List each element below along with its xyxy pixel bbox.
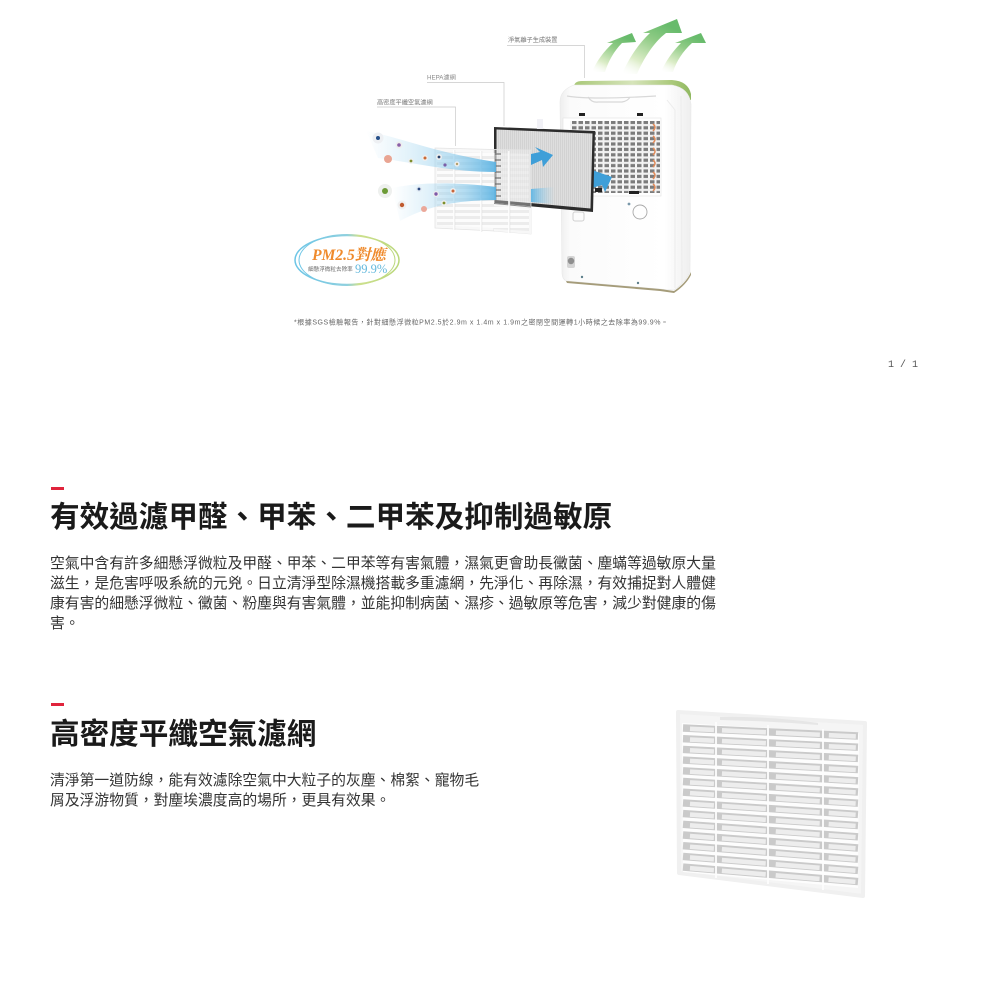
airflow stream: lower	[392, 183, 496, 221]
section accent: red dash	[51, 487, 64, 490]
grill frame	[563, 118, 661, 196]
text block: flat-woven filter: 清淨第一道防線，能有效濾除空氣中大粒子的灰塵、棉絮、寵物毛	[50, 773, 479, 789]
panel: high density flat-woven filter	[435, 148, 531, 234]
badge: PM2.5: 99.9%	[355, 262, 387, 276]
label: flat-woven filter	[377, 98, 456, 146]
text block: VOC filtering: 害。	[50, 616, 80, 632]
text block: flat-woven filter	[50, 772, 479, 809]
icon: green airflow arrows	[592, 19, 706, 74]
dark tabs	[595, 188, 639, 194]
heading: flat-woven filter: 高密度平纖空氣濾網	[50, 718, 316, 751]
base shadow	[566, 272, 691, 293]
airflow stream: through HEPA	[531, 187, 555, 204]
text block: VOC filtering: 康有害的細懸浮微粒、黴菌、粉塵與有害氣體，並能抑制病菌、濕疹、過敏原等危害，減少對健康的傷	[50, 596, 716, 612]
pagination: 1 / 1	[888, 360, 918, 371]
control knob	[628, 203, 647, 219]
clips	[579, 113, 643, 116]
label: HEPA: HEPA濾網	[427, 74, 456, 82]
text block: VOC filtering: 滋生，是危害呼吸系統的元兇。日立清淨型除濕機搭載多重濾網，先淨化、再除濕，有效捕捉對人體健	[50, 576, 716, 592]
panel: HEPA filter	[494, 119, 595, 212]
label: ion generator	[507, 36, 584, 78]
arrow: blue on unit	[592, 170, 612, 192]
unit body	[560, 85, 691, 290]
HEPA frame seen through filter	[494, 204, 531, 207]
text block: VOC filtering: 空氣中含有許多細懸浮微粒及甲醛、甲苯、二甲苯等有害氣體，濕氣更會助長黴菌、塵蟎等過敏原大量	[50, 556, 716, 572]
orange coil strip	[653, 124, 655, 191]
badge: PM2.5	[295, 234, 399, 286]
airflow stream: upper	[366, 131, 496, 172]
badge: PM2.5: PM2.5對應	[312, 246, 388, 264]
heading: VOC filtering: 有效過濾甲醛、甲苯、二甲苯及抑制過敏原	[50, 501, 612, 534]
badge: PM2.5: 細懸浮微粒去除率	[308, 265, 353, 273]
arrow: blue on HEPA	[531, 147, 553, 167]
handle	[567, 96, 656, 102]
section accent: red dash	[51, 703, 64, 706]
screws	[581, 276, 639, 284]
grill lattice	[570, 121, 660, 193]
product diagram: dehumidifier with filters	[294, 19, 706, 326]
label: ion generator: 淨氣離子生成裝置	[508, 36, 558, 44]
label: flat-woven filter: 高密度平纖空氣濾網	[377, 98, 433, 106]
footnote: *根據SGS檢驗報告，針對細懸浮微粒PM2.5於2.9m x 1.4m x 1.9m之密閉空間運轉1小時候之去除率為99.9%。	[294, 318, 668, 326]
label: HEPA	[427, 74, 504, 126]
drain port	[567, 256, 575, 268]
dehumidifier unit	[560, 80, 691, 293]
side panel seams	[667, 96, 682, 288]
latch	[573, 212, 584, 221]
text block: VOC filtering	[50, 555, 716, 632]
dark slats seen over HEPA	[495, 154, 501, 196]
text block: flat-woven filter: 屑及浮游物質，對塵埃濃度高的場所，更具有效果。	[50, 793, 390, 809]
tab	[537, 119, 543, 129]
particles	[372, 132, 460, 212]
green top band	[574, 80, 691, 100]
